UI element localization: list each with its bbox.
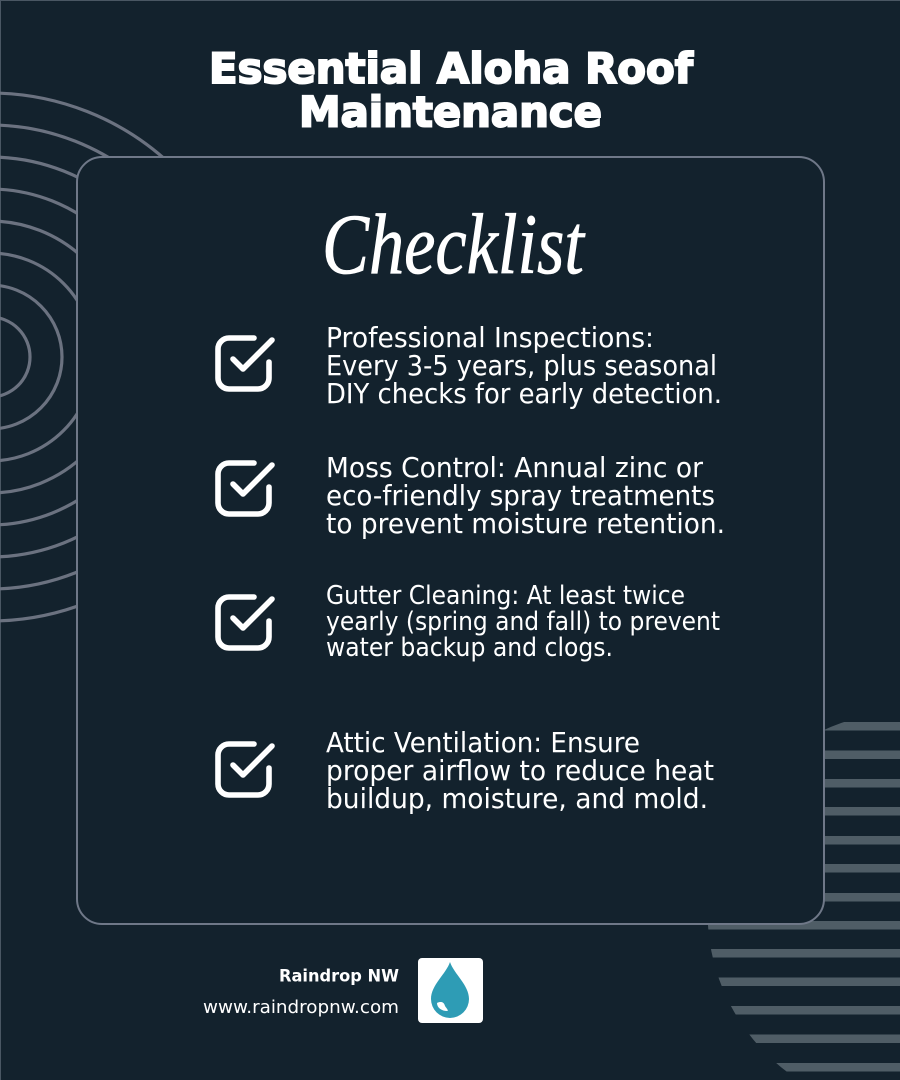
text: moss control: Moss Control: Annual zinc or — [326, 451, 703, 484]
footer: company name: Raindrop NW — [279, 966, 399, 986]
text: professional inspections — [326, 321, 722, 410]
icon: raindrop logo — [418, 958, 483, 1023]
title: Essential Aloha Roof — [209, 44, 694, 93]
panel: checklist — [77, 157, 824, 924]
text: moss control: eco-friendly spray treatments — [326, 479, 715, 512]
text: gutter cleaning: Gutter Cleaning: At least twice — [326, 581, 685, 611]
icon: checkbox 4 — [218, 744, 272, 795]
decorative concentric circles — [0, 93, 254, 621]
text: moss control — [326, 451, 725, 540]
title: Maintenance — [299, 88, 602, 136]
text: attic ventilation — [326, 726, 714, 815]
text: gutter cleaning: water backup and clogs. — [326, 633, 613, 663]
heading: Checklist: Checklist — [322, 196, 586, 292]
text: attic ventilation: proper airflow to reduce heat — [326, 754, 714, 787]
footer: website: www.raindropnw.com — [203, 997, 399, 1018]
text: professional inspections: Every 3-5 years, plus seasonal — [326, 349, 717, 382]
icon: checkbox 2 — [218, 463, 272, 514]
panel background — [77, 157, 824, 924]
text: attic ventilation: Attic Ventilation: Ensure — [326, 726, 640, 759]
title — [209, 44, 694, 136]
text: professional inspections: Professional Inspections: — [326, 321, 654, 354]
text: attic ventilation: buildup, moisture, and mold. — [326, 782, 708, 815]
text: moss control: to prevent moisture retention. — [326, 507, 725, 540]
icon: checkbox 3 — [218, 597, 272, 648]
text: professional inspections: DIY checks for early detection. — [326, 377, 722, 410]
text: gutter cleaning — [326, 581, 720, 663]
decorative striped circle — [700, 722, 900, 1072]
text: gutter cleaning: yearly (spring and fall) to prevent — [326, 607, 720, 637]
icon: checkbox 1 — [218, 338, 272, 389]
